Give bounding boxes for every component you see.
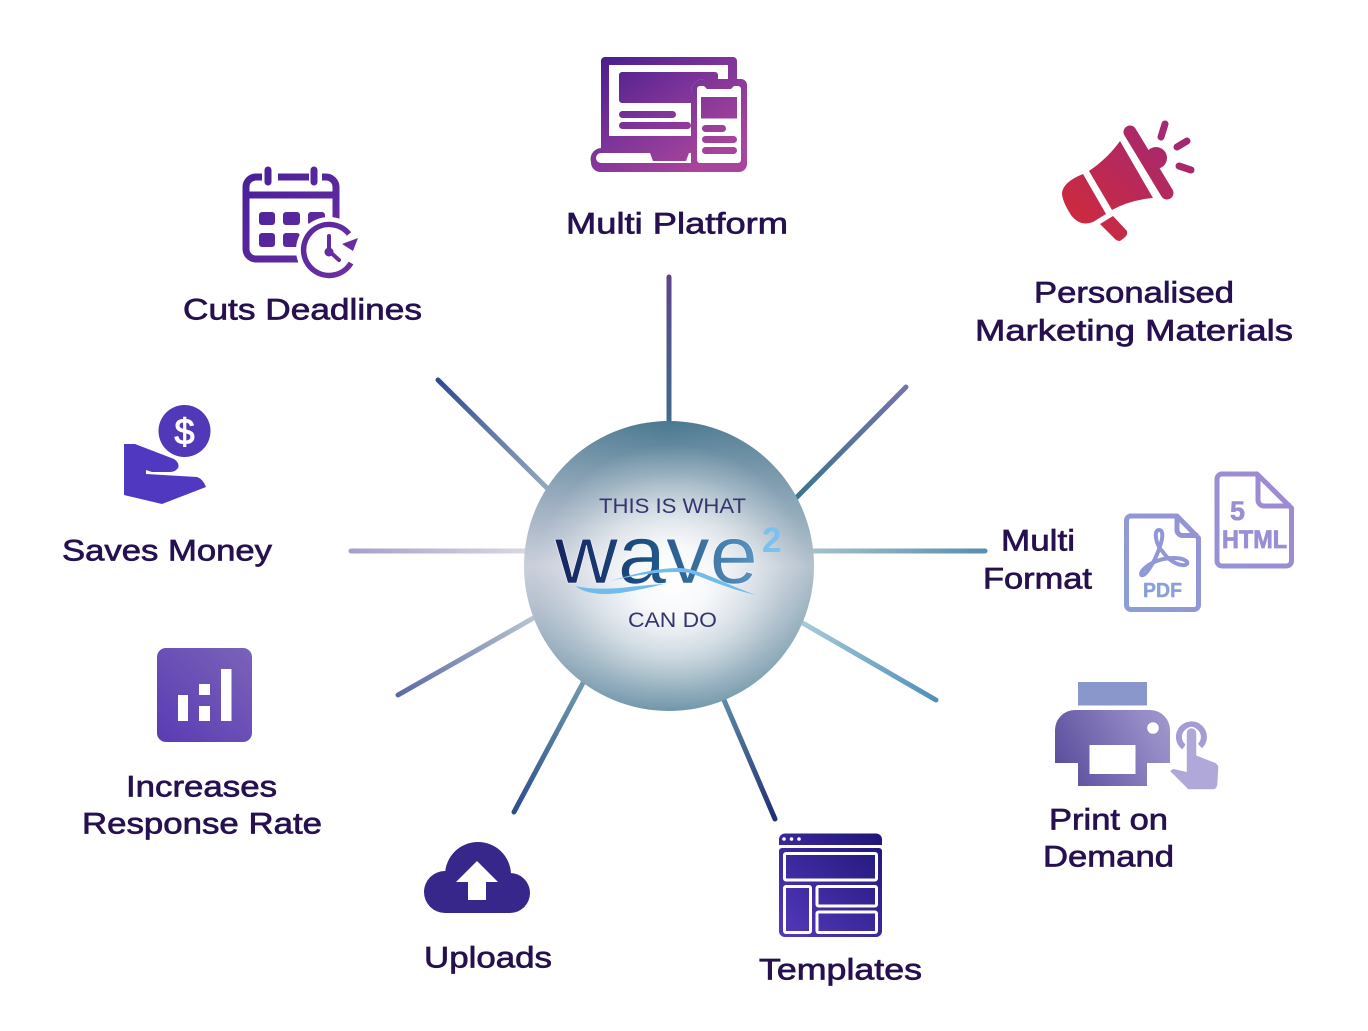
item: templates [759, 834, 922, 986]
label: Cuts Deadlines [183, 294, 422, 326]
icon: laptop and phone [591, 57, 747, 172]
spokes radiating from the centre [351, 277, 985, 819]
central sphere with Wave2 logo [524, 421, 814, 711]
label [1043, 804, 1174, 874]
item: print on demand [1043, 682, 1219, 874]
item: saves money [62, 405, 272, 568]
item: increases response rate [82, 648, 322, 840]
icon: printer with touch finger [1055, 682, 1219, 790]
label: Multi [1001, 524, 1075, 558]
icon: PDF and HTML5 documents: 5 [1230, 496, 1245, 526]
icon: hand with coin: $ [174, 411, 195, 452]
label: Saves Money [62, 534, 272, 568]
label: Marketing Materials [975, 314, 1293, 348]
label: Increases [126, 770, 277, 804]
icon: calendar with clock [246, 170, 362, 283]
logo word: wave: wave [554, 508, 758, 601]
label: Multi Platform [566, 208, 788, 240]
label [983, 524, 1093, 596]
label [975, 276, 1293, 348]
label: Personalised [1034, 276, 1234, 310]
item: personalised marketing materials [975, 124, 1293, 348]
label: Uploads [424, 942, 552, 974]
label: Demand [1043, 840, 1174, 874]
item: uploads [424, 842, 552, 974]
label [82, 770, 322, 840]
item: multi platform [566, 57, 788, 240]
icon: PDF and HTML5 documents: PDF [1143, 580, 1182, 602]
label: Templates [759, 954, 922, 986]
icon: website template [779, 834, 882, 937]
logo superscript 2: 2 [762, 521, 781, 560]
icon: PDF and HTML5 documents: HTML [1222, 526, 1287, 554]
sphere text: can do: CAN DO [628, 609, 717, 632]
sphere text: this is what: THIS IS WHAT [599, 495, 746, 518]
icon: cloud upload [424, 842, 530, 913]
label: Response Rate [82, 808, 322, 840]
logo swoosh [575, 568, 756, 595]
item: multi format [983, 474, 1292, 610]
label: Print on [1049, 804, 1168, 836]
icon: megaphone [1062, 124, 1191, 241]
label: Format [983, 562, 1093, 596]
item: cuts deadlines [183, 170, 422, 326]
icon: PDF and HTML5 documents [1126, 474, 1292, 610]
icon: bar chart tile [157, 648, 252, 742]
icon: hand with coin [124, 405, 210, 504]
